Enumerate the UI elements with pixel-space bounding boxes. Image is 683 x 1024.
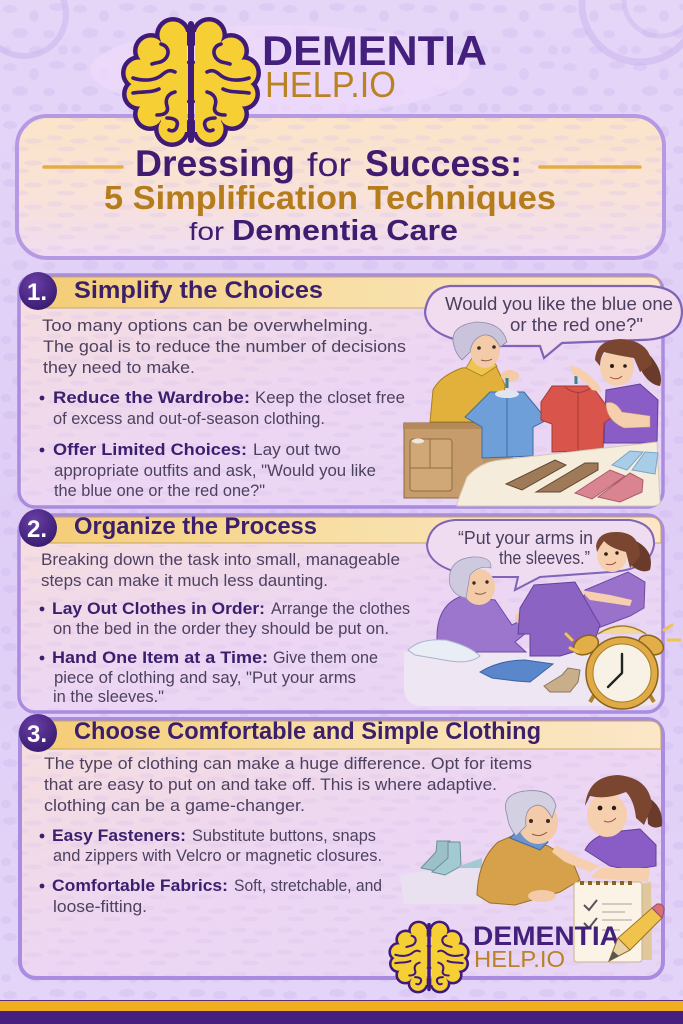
intro text: they need to make. (43, 358, 195, 377)
caregiver (552, 775, 662, 882)
panel: title (17, 116, 664, 258)
small bed (400, 868, 482, 904)
bullet: reduce the wardrobe (40, 388, 405, 428)
bullet: easy fasteners (40, 826, 382, 865)
title line 1: Dressing (135, 143, 295, 184)
wordmark: HELP.IO (474, 946, 565, 972)
number badge (19, 272, 57, 310)
intro text (44, 754, 532, 815)
bullet: reduce the wardrobe: Keep the closet free (255, 388, 405, 407)
heading: Simplify the Choices (74, 277, 323, 304)
illustration: handing over a jacket (404, 520, 680, 709)
speech bubble (425, 286, 682, 358)
logo: bottom Dementia Help.io (388, 921, 620, 993)
panel 2: organize the process (19, 509, 680, 712)
intro text: The goal is to reduce the number of decisions (43, 337, 406, 356)
bullet: lay out clothes in order (40, 599, 410, 638)
intro text: steps can make it much less daunting. (41, 571, 328, 590)
wordmark: DEMENTIA (473, 921, 620, 951)
logo: Dementia Help.io header (17, 17, 664, 258)
bullet: offer limited choices: Offer Limited Choices: (53, 440, 247, 459)
intro text: that are easy to put on and take off. This is where adaptive. (44, 775, 497, 794)
heading band (30, 721, 661, 749)
older woman (437, 557, 533, 652)
number badge: 2. (27, 516, 47, 543)
speech bubble: “Put your arms in (458, 528, 593, 548)
bullet: offer limited choices (40, 440, 376, 500)
caregiver arm (580, 590, 632, 606)
bullet: easy fasteners: Easy Fasteners: (52, 826, 186, 845)
older person (477, 791, 580, 905)
title line 2: 5 Simplification Techniques (104, 179, 556, 216)
icon: brain logo small (388, 921, 470, 993)
logo wordmark: DEMENTIA (262, 27, 487, 74)
bullet: easy fasteners: Substitute buttons, snaps (192, 826, 376, 845)
title line 1: for (307, 146, 351, 183)
speech bubble (427, 520, 654, 590)
bullet: offer limited choices: Lay out two (253, 440, 341, 459)
blue socks and tan sock (480, 660, 580, 692)
intro text: Too many options can be overwhelming. (42, 316, 373, 335)
bullet: offer limited choices: appropriate outfits and ask, "Would you like (54, 461, 376, 480)
red shirt (541, 376, 614, 452)
heading band (30, 517, 661, 543)
bullet: reduce the wardrobe: of excess and out-of-season clothing. (53, 409, 325, 428)
illustration: caregiver and notepad (400, 775, 662, 962)
title line 1 (135, 143, 522, 184)
caregiver (595, 339, 661, 443)
caregiver (582, 532, 651, 628)
illustration: offering two shirts (403, 286, 682, 506)
bullet: hand one item at a time: piece of clothing and say, "Put your arms (54, 668, 356, 687)
bed and folded clothes (457, 442, 660, 506)
bullet: offer limited choices: the blue one or the red one?" (54, 481, 265, 500)
title line 3: Dementia Care (232, 215, 458, 247)
number badge (19, 509, 57, 547)
bullet: hand one item at a time: Give them one (273, 648, 378, 667)
bullet: reduce the wardrobe: Reduce the Wardrobe: (53, 388, 250, 407)
panel 1: simplify the choices (19, 272, 682, 507)
older woman (430, 322, 519, 422)
speech bubble: the sleeves.” (499, 548, 590, 568)
speech bubble: or the red one?" (510, 315, 643, 335)
intro text: Breaking down the task into small, manageable (41, 550, 400, 569)
logo wordmark: HELP.IO (265, 64, 396, 105)
wordmark (473, 921, 620, 972)
bullet: easy fasteners: and zippers with Velcro or magnetic closures. (53, 846, 382, 865)
panel 3: choose comfortable and simple clothing (19, 714, 664, 993)
number badge (19, 714, 57, 752)
footer bars (0, 1000, 683, 1024)
bullet: hand one item at a time: Hand One Item at a Time: (52, 648, 268, 667)
bullet: comfortable fabrics: loose-fitting. (53, 897, 147, 916)
title line 1: Success: (365, 143, 522, 184)
number badge: 1. (27, 279, 47, 306)
pillow (408, 640, 480, 662)
intro text (42, 316, 406, 377)
icon: brain logo (121, 17, 261, 147)
bullet: comfortable fabrics: Comfortable Fabrics: (52, 876, 228, 895)
heading: Choose Comfortable and Simple Clothing (74, 718, 541, 745)
heading: Organize the Process (74, 513, 317, 540)
bullet: lay out clothes in order: Lay Out Clothes in Order: (52, 599, 265, 618)
bullet: lay out clothes in order: Arrange the clothes (271, 599, 410, 618)
notepad (574, 882, 652, 962)
alarm clock (566, 625, 680, 709)
number badge: 3. (27, 721, 47, 748)
desk (403, 423, 513, 498)
intro text: The type of clothing can make a huge difference. Opt for items (44, 754, 532, 773)
bullet: hand one item at a time: in the sleeves." (53, 687, 164, 706)
speech bubble: Would you like the blue one (445, 294, 673, 314)
purple jacket (518, 582, 600, 656)
blue shirt (465, 378, 547, 458)
bed (404, 645, 660, 706)
heading band (30, 277, 661, 308)
bullet: lay out clothes in order: on the bed in the order they should be put on. (53, 619, 389, 638)
bullet: comfortable fabrics (40, 876, 382, 916)
bullet: comfortable fabrics: Soft, stretchable, and (234, 876, 382, 895)
logo wordmark (262, 27, 487, 105)
caregiver arms (570, 366, 650, 428)
bullet: hand one item at a time (40, 648, 378, 706)
intro text (41, 550, 400, 590)
icon: pencil (609, 904, 664, 961)
intro text: clothing can be a game-changer. (44, 796, 305, 815)
title line 3: for (189, 218, 224, 246)
socks (421, 841, 482, 875)
